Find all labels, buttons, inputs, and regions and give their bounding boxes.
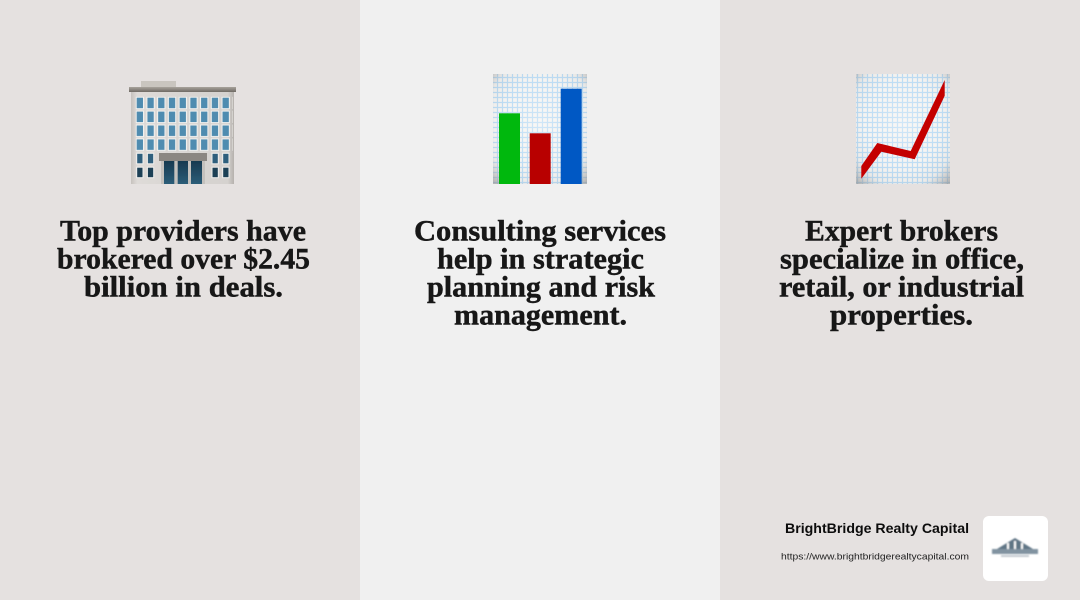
text: left panel statement: brokered over $2.45 <box>57 242 310 276</box>
bar: green <box>499 113 520 184</box>
panel: right background <box>720 0 1080 600</box>
text: middle panel statement: management. <box>454 298 627 332</box>
text: left panel statement: billion in deals. <box>84 270 283 304</box>
text: right panel statement: specialize in office, <box>780 242 1024 276</box>
panel: left background <box>0 0 360 600</box>
text: middle panel statement: help in strategic <box>437 242 644 276</box>
trend line <box>861 80 945 179</box>
footer: website url: https://www.brightbridgerealtycapital.com <box>781 552 969 562</box>
text: right panel statement: properties. <box>830 298 973 332</box>
text: right panel statement: Expert brokers <box>805 214 998 248</box>
bar: blue <box>561 89 582 184</box>
text: right panel statement: retail, or industrial <box>779 270 1024 304</box>
text: left panel statement: Top providers have <box>60 214 306 248</box>
text: middle panel statement <box>414 214 666 332</box>
icon: bar chart <box>493 74 587 184</box>
text: left panel statement <box>57 214 310 304</box>
bar: red <box>530 133 551 184</box>
icon: line chart trending up <box>856 74 950 184</box>
text: right panel statement <box>779 214 1024 332</box>
text: middle panel statement: Consulting services <box>414 214 666 248</box>
footer: company name: BrightBridge Realty Capital <box>785 521 969 536</box>
text: middle panel statement: planning and risk <box>427 270 655 304</box>
icon: office building <box>129 81 236 184</box>
footer: logo card <box>983 516 1048 581</box>
panel: middle background <box>360 0 720 600</box>
logo: roof mark <box>992 538 1038 557</box>
